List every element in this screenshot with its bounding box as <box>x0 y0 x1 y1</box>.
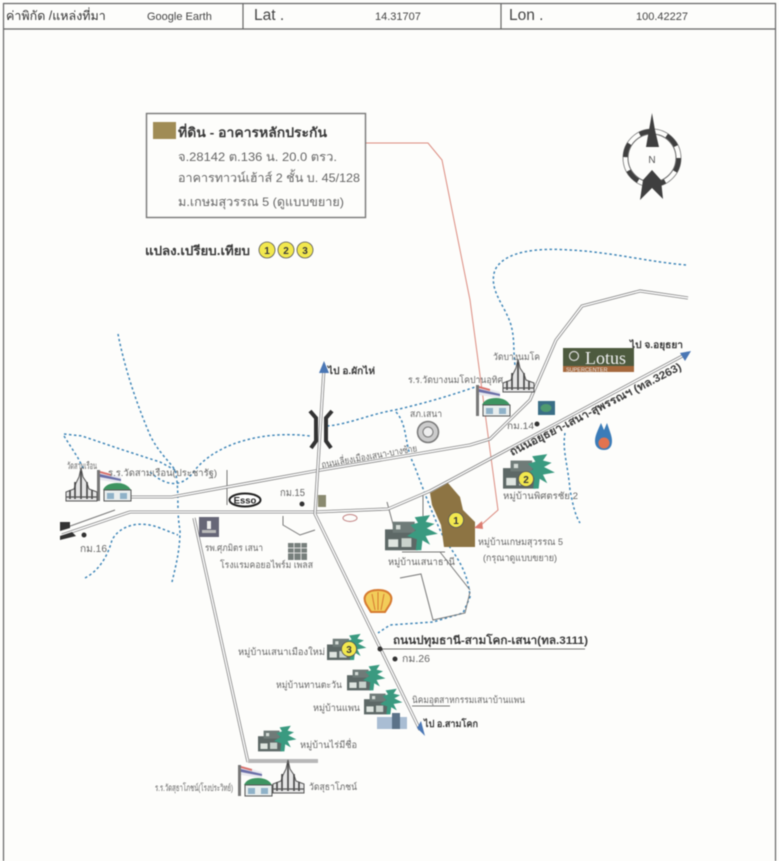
header: latitude label: Lat . <box>254 7 284 24</box>
icon: Shell logo <box>365 590 391 612</box>
map labels: กม.16 <box>80 544 107 555</box>
marker 1 <box>448 512 464 528</box>
map labels: หมู่บ้านเกษมสุวรรณ 5 <box>478 537 563 548</box>
railway block at west edge <box>60 522 76 540</box>
marker 2: 2 <box>523 475 529 486</box>
map labels: (กรุณาดูแบบขยาย) <box>483 553 557 564</box>
map labels: ไป จ.อยุธยา <box>629 339 683 351</box>
map labels: รพ.ศุภมิตร เสนา <box>205 543 263 554</box>
icon: temple at Suthaphot <box>273 760 304 793</box>
road: Ayutthaya–Sena main <box>62 353 688 535</box>
comparison plots label: 3 <box>302 246 308 257</box>
header: latitude value: 14.31707 <box>375 11 421 23</box>
icon: bank square <box>538 401 555 415</box>
map labels: หมู่บ้านแพน <box>313 703 360 714</box>
road: south cross street <box>248 759 318 763</box>
icon: car logo <box>343 514 357 522</box>
map labels: วัดสามเรือน <box>67 461 97 472</box>
icon: Lotus supercenter: SUPERCENTER <box>566 368 608 374</box>
map labels: วัดบางนมโค <box>493 351 540 363</box>
blue waterways <box>64 249 686 633</box>
icon: hospital <box>199 517 219 537</box>
land plot <box>430 483 475 547</box>
map labels: ร.ร.วัดสามเรือน(ประชารัฐ) <box>108 468 217 479</box>
kilometre markers <box>82 422 540 662</box>
icon: Lotus supercenter: Lotus <box>585 348 626 368</box>
road: Sena bypass <box>128 291 688 497</box>
marker 3 <box>342 642 356 656</box>
icon: police station seal <box>418 422 438 442</box>
icon: school at Sam Ruean <box>97 470 131 501</box>
map labels: นิคมอุตสาหกรรมเสนาบ้านแพน <box>412 695 525 706</box>
map labels: ถนนเลี่ยงเมืองเสนา-บางซ้าย <box>320 441 418 471</box>
comparison plots label: 1 <box>264 246 270 257</box>
icon: north compass: N <box>648 155 656 166</box>
header table <box>3 3 776 29</box>
icon: small shop <box>318 495 326 507</box>
icon: village Rai <box>258 726 296 751</box>
icon: Esso logo: Esso <box>234 496 257 506</box>
map labels: หมู่บ้านเสนาเมืองใหม่ <box>238 646 325 658</box>
icon: village Thantawan <box>347 665 385 690</box>
map labels: หมู่บ้านพิศตรชัย 2 <box>503 491 578 502</box>
comparison plots label <box>145 242 313 258</box>
map labels: กม.15 <box>280 488 305 499</box>
header: longitude label: Lon . <box>509 7 543 24</box>
icon: village 3 <box>327 634 366 660</box>
map labels: ไป อ.สามโคก <box>423 718 478 730</box>
icon: Lotus supercenter <box>563 348 634 374</box>
marker 1: 1 <box>453 516 459 527</box>
icon: school at Suthaphot <box>238 765 272 796</box>
map labels: หมู่บ้านทานตะวัน <box>276 680 342 691</box>
map labels: ร.ร.วัดสุธาโภชน์(โรงประวิทย์) <box>155 782 233 794</box>
minor roads and boundaries <box>227 470 585 706</box>
legend title: ที่ดิน - อาคารหลักประกัน <box>178 123 327 140</box>
road: Pak Hai to Sam Khok <box>315 368 420 730</box>
icon: factory <box>377 713 407 729</box>
comparison plots label: 2 <box>283 246 289 257</box>
icon: village Phan <box>364 689 402 714</box>
marker 3: 3 <box>346 645 352 656</box>
icon: bridge <box>310 411 332 448</box>
legend line 3: ม.เกษมสุวรรณ 5 (ดูแบบขยาย) <box>178 195 344 210</box>
map labels: กม.26 <box>402 654 430 665</box>
icon: hotel <box>288 543 307 560</box>
map labels: กม.14 <box>507 421 534 432</box>
map labels: ร.ร.วัดบางนมโคปานอุทิศ <box>408 374 503 386</box>
legend line 1: จ.28142 ต.136 น. 20.0 ตรว. <box>178 150 337 164</box>
map labels: หมู่บ้านเสนาธานี <box>388 556 455 568</box>
arrowheads <box>319 351 691 736</box>
comparison plots label: แปลง.เปรียบ.เทียบ <box>145 244 250 258</box>
legend swatch <box>153 122 176 139</box>
icon: temple at Sam Ruean <box>66 468 97 501</box>
header: coordinate source label: ค่าพิกัด /แหล่งที่มา <box>6 7 106 23</box>
map labels: วัดสุธาโภชน์ <box>309 781 357 793</box>
map labels: สภ.เสนา <box>410 409 442 420</box>
map labels: หมู่บ้านไร่มีชื่อ <box>300 738 357 751</box>
legend line 2: อาคารทาวน์เฮ้าส์ 2 ชั้น บ. 45/128 <box>178 169 360 185</box>
map labels <box>67 339 684 794</box>
road: western branch <box>194 518 248 762</box>
icon: PTT flame <box>595 423 612 450</box>
map labels: โรงแรมคอยอไพร์ม เพลส <box>220 559 313 571</box>
icon: village Senathani <box>385 515 438 550</box>
red leader line from legend to plot <box>365 143 498 526</box>
header: source: Google Earth <box>147 11 212 23</box>
icon: temple at Bang Nom Kho <box>503 359 534 392</box>
icon: village 2 <box>503 454 555 489</box>
map labels: ไป อ.ผักไห่ <box>327 365 375 377</box>
icon: school at Bang Nom Kho <box>476 385 510 416</box>
map labels: ถนนอยุธยา-เสนา-สุพรรณฯ (ทล.3263) <box>508 361 684 460</box>
marker 2 <box>518 472 534 486</box>
icon: Esso logo <box>230 494 260 506</box>
map labels: ถนนปทุมธานี-สามโคก-เสนา(ทล.3111) <box>393 633 588 648</box>
header: longitude value: 100.42227 <box>636 11 688 23</box>
icon: north compass <box>623 113 681 200</box>
legend box <box>146 114 366 218</box>
